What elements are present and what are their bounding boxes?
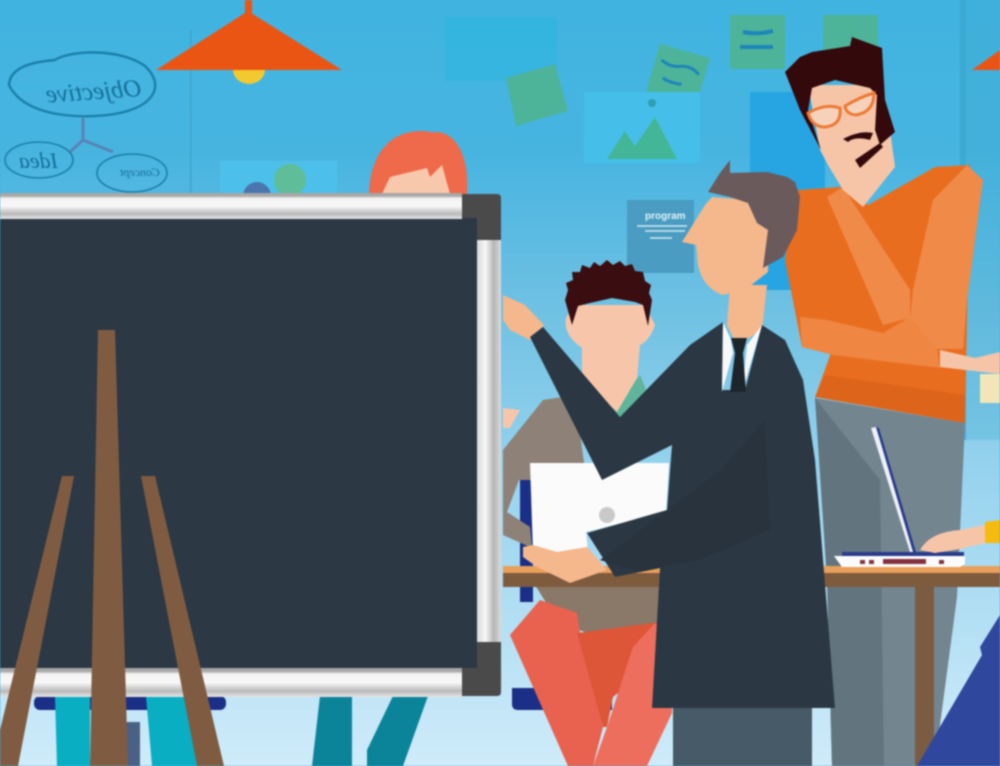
- collar strips: [722, 322, 762, 393]
- wall panel seam: [190, 30, 192, 195]
- trouser seat: [577, 622, 660, 727]
- blue poster: [750, 92, 825, 290]
- hand: [940, 350, 1000, 374]
- raised forearm: [827, 187, 910, 325]
- neck: [727, 285, 767, 345]
- orange sweater man: [785, 37, 1000, 552]
- sleeve shade: [600, 420, 770, 572]
- hanging lamp left: [156, 0, 342, 84]
- mind map labels: Concept: [119, 165, 160, 179]
- sticky note 3: [730, 15, 785, 69]
- sticky note 1: [506, 64, 568, 126]
- wall picture top: [445, 17, 557, 81]
- sitting man: [503, 260, 672, 766]
- easel legs: [0, 330, 224, 766]
- note paper: [980, 374, 1000, 403]
- hand typing: [920, 520, 1000, 553]
- wall column right: [960, 0, 1000, 440]
- hanging lamp right: [972, 50, 1000, 70]
- bottom rail: [0, 668, 462, 697]
- chair frame: [512, 478, 612, 710]
- mind map labels: Idea: [19, 148, 59, 173]
- sticky note 2: [646, 44, 710, 108]
- shirt sleeve and body: [503, 395, 585, 548]
- chair left of board: [34, 696, 226, 710]
- hand on folder: [523, 545, 607, 583]
- hand behind: [503, 408, 520, 428]
- sticky note 4: [823, 15, 878, 55]
- laptop: [834, 552, 965, 567]
- right arm: [910, 165, 983, 349]
- mind map sketch: [5, 52, 167, 192]
- teal legs woman: [312, 696, 428, 766]
- top rail: [0, 193, 462, 219]
- tie: [730, 338, 747, 392]
- left trouser leg: [510, 600, 603, 766]
- board surface: [0, 216, 477, 669]
- right rail: [477, 240, 501, 643]
- suit coat: [530, 322, 835, 708]
- mind map labels: Objective: [45, 75, 142, 109]
- forearm across waist: [800, 317, 940, 368]
- grey hair: [708, 160, 800, 268]
- woman with red hair: [369, 131, 467, 194]
- face and neck: [566, 305, 655, 412]
- laptop screen: [871, 427, 915, 552]
- program poster: [627, 200, 694, 273]
- sweater body: [785, 165, 970, 423]
- man in suit: [503, 160, 835, 766]
- top corner: [462, 194, 501, 240]
- right trouser leg: [593, 623, 672, 766]
- bottom corner: [462, 642, 501, 696]
- trousers: [673, 700, 812, 766]
- folder dot: [599, 507, 615, 523]
- grey trousers: [815, 398, 965, 766]
- teal collar: [612, 375, 647, 418]
- white folder: [530, 463, 669, 553]
- table: [503, 566, 1000, 766]
- face and neck: [808, 85, 895, 207]
- blackboard: [0, 193, 501, 697]
- program poster: program: [645, 211, 686, 222]
- teal legs left: [55, 696, 198, 766]
- face: [682, 197, 768, 295]
- wall picture behind woman: [220, 161, 337, 210]
- sweater hem shade: [815, 375, 965, 423]
- hand raised: [503, 295, 544, 340]
- blue trouser leg: [917, 615, 1000, 766]
- glasses: [808, 93, 874, 127]
- landscape picture: [584, 92, 700, 163]
- beard: [843, 132, 883, 168]
- hair: [785, 37, 895, 150]
- spiky hair: [565, 260, 652, 326]
- mind map labels: [19, 75, 160, 179]
